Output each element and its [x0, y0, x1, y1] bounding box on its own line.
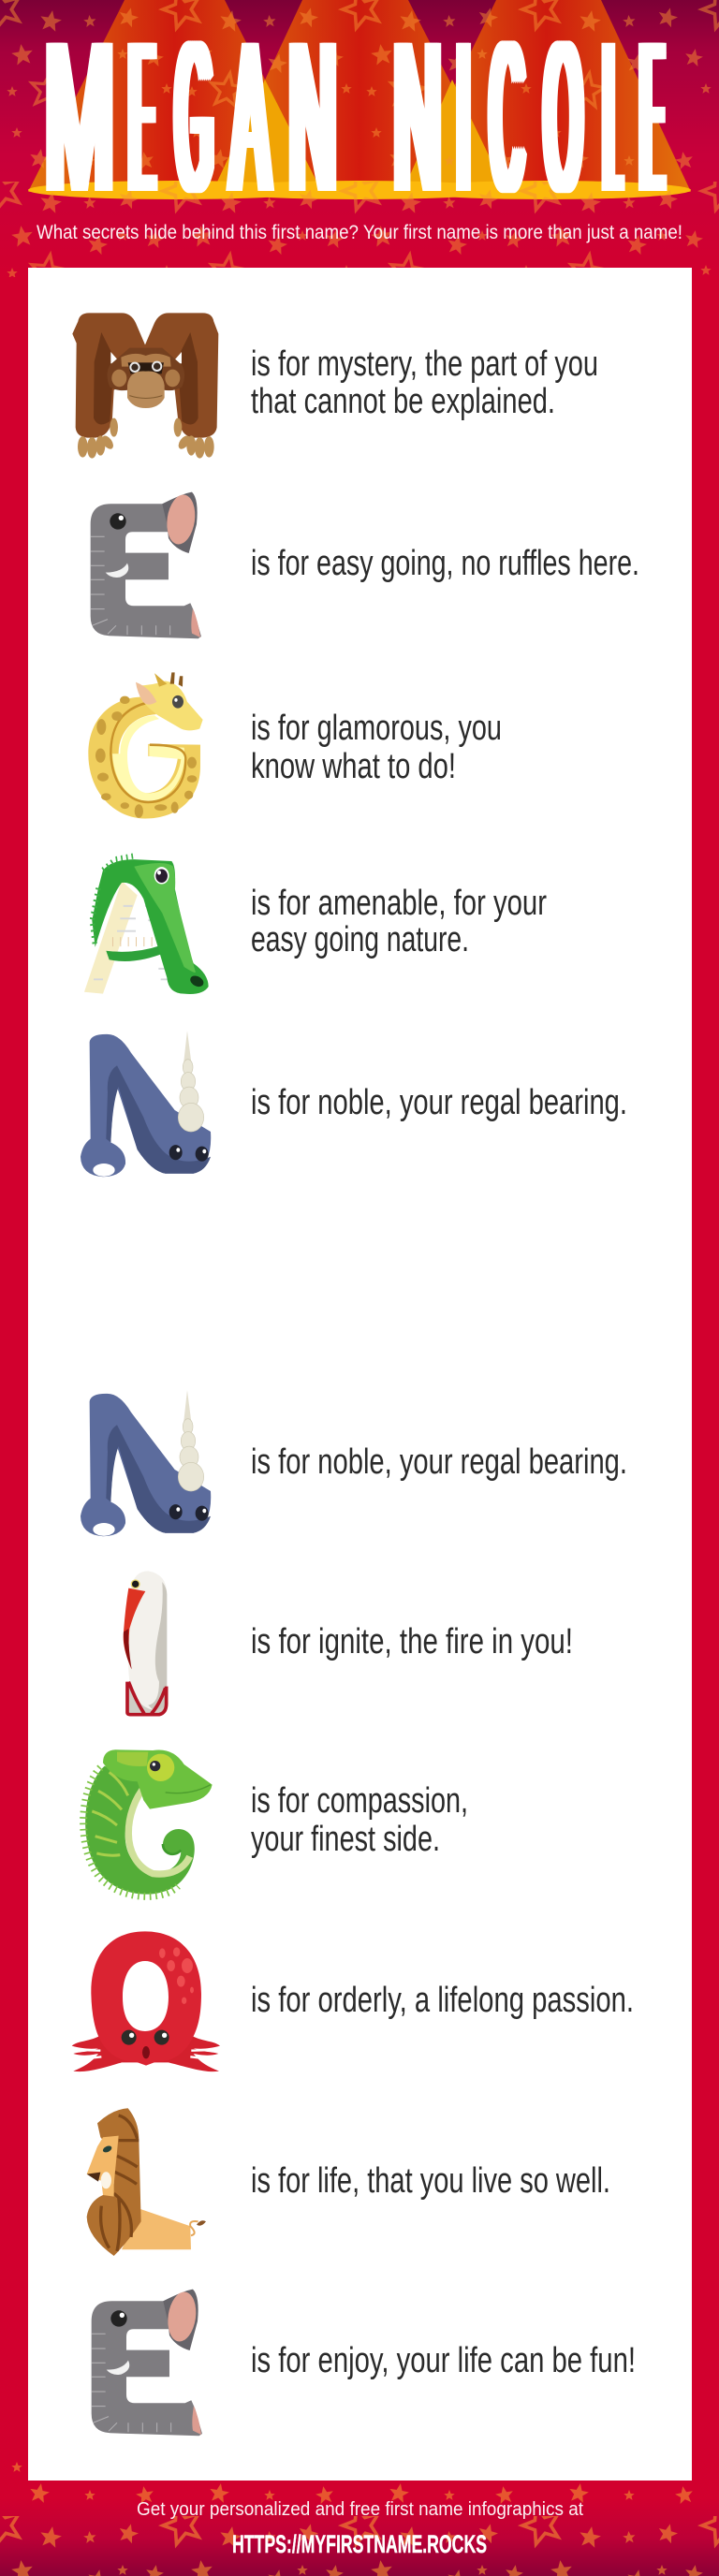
title: C [485, 0, 517, 237]
text: A [251, 884, 547, 959]
title: M [39, 0, 109, 237]
footer line: Get your personalized and free first name infographics at [137, 2499, 583, 2520]
icon: elephant letter E second [92, 2290, 202, 2436]
text: L: is for life, that you live so well. [251, 2161, 610, 2201]
title: I [452, 0, 463, 237]
title: E [636, 0, 657, 237]
title: N [389, 0, 435, 237]
text: I: is for ignite, the fire in you! [251, 1622, 573, 1661]
icon: elephant letter E [91, 492, 201, 638]
text: M [251, 344, 598, 421]
icon: stork letter I [124, 1571, 167, 1715]
text: G [251, 709, 502, 786]
panel: white card [28, 268, 692, 2481]
title: G [170, 0, 206, 237]
title: A [226, 0, 263, 237]
footer url: HTTPS://MYFIRSTNAME.ROCKS [232, 2530, 487, 2558]
icon: crocodile letter A [84, 856, 209, 994]
icon: monkey letter M [72, 313, 218, 459]
text: A: is for amenable, for your [251, 884, 547, 923]
star pattern bottom [0, 2462, 719, 2576]
star pattern top [0, 0, 719, 277]
icon: lion letter L [87, 2108, 206, 2256]
icon: giraffe letter G [88, 672, 203, 819]
text: A: easy going nature. [251, 920, 469, 959]
title: O [539, 0, 576, 237]
text: C: is for compassion, [251, 1781, 468, 1821]
text: G: is for glamorous, you [251, 709, 502, 748]
text: C [251, 1781, 468, 1859]
text: G: know what to do! [251, 747, 456, 786]
title: N [284, 0, 330, 237]
title [39, 0, 667, 237]
title: L [599, 0, 615, 237]
icon: narwhal letter N [81, 1031, 211, 1177]
text: M: is for mystery, the part of you [251, 344, 598, 384]
icon: chameleon letter C [83, 1749, 213, 1896]
title: E [125, 0, 148, 237]
text: M: that cannot be explained. [251, 382, 555, 421]
text: C: your finest side. [251, 1820, 440, 1859]
icon: octopus letter O [72, 1931, 220, 2071]
icon: narwhal letter N second [81, 1390, 211, 1536]
spotlights [28, 0, 691, 199]
